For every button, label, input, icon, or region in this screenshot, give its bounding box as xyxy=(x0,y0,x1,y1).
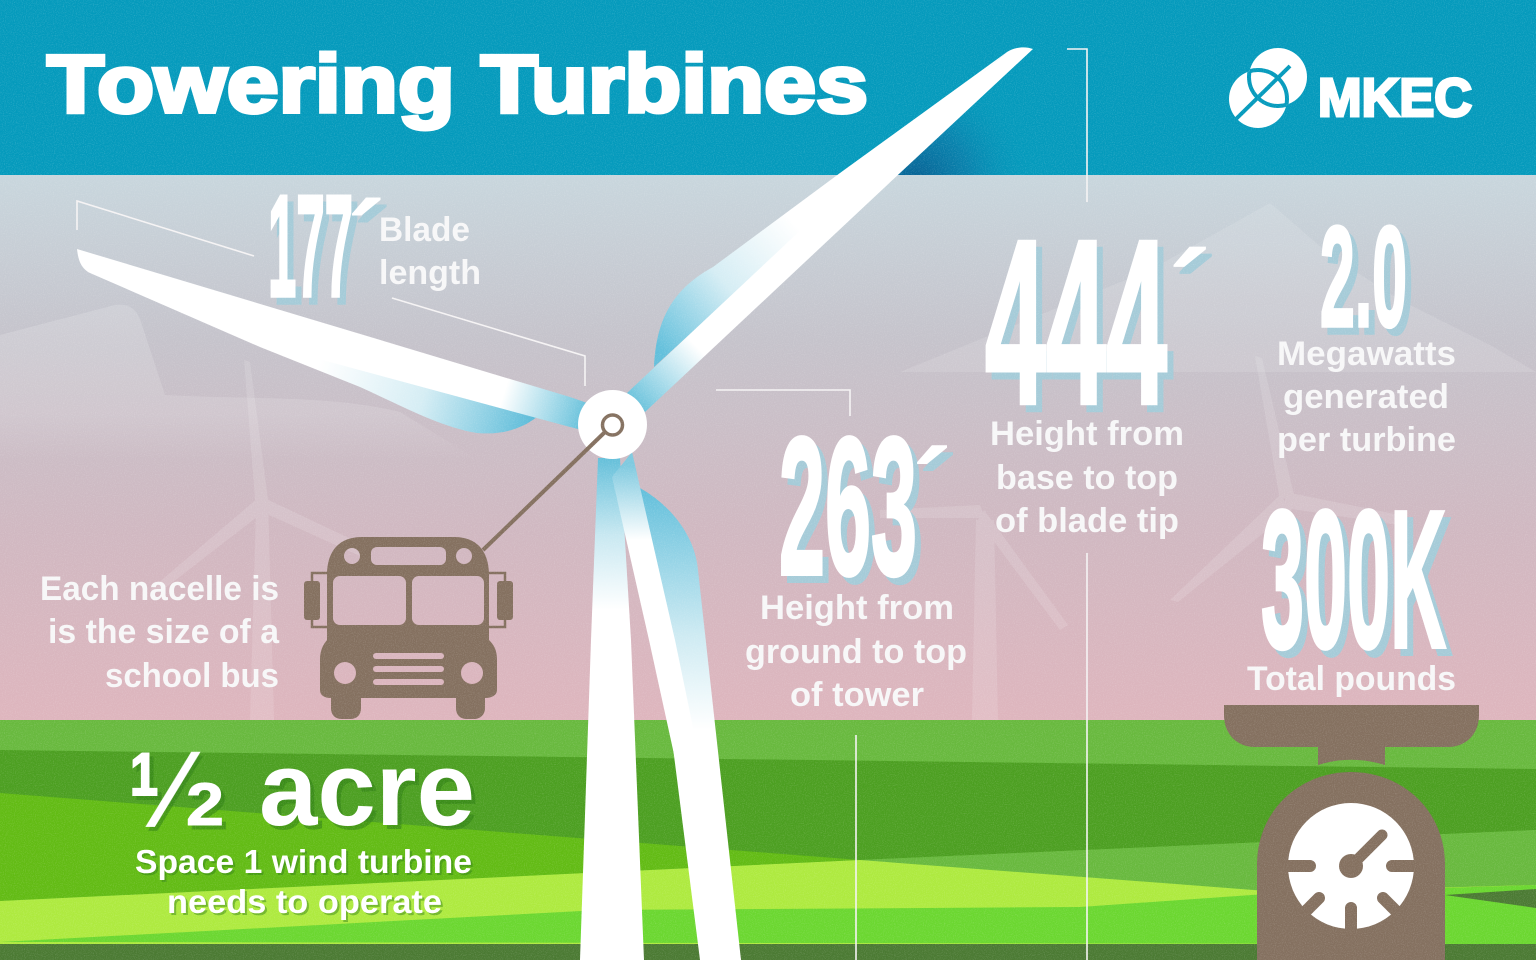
stat: blade length: Blade xyxy=(379,211,470,249)
stat: blade length: ´ xyxy=(347,179,385,307)
tower xyxy=(580,458,644,960)
stat: total pounds: Total pounds xyxy=(1247,660,1456,698)
stat: tower height xyxy=(745,397,967,714)
stat: blade length: length xyxy=(379,254,481,292)
logo: MKEC xyxy=(1229,48,1472,128)
blade bulge: left xyxy=(90,273,570,433)
stat: tower height: of tower xyxy=(790,676,924,714)
nacelle ring and pointer line xyxy=(483,432,605,550)
logo: MKEC: MKEC xyxy=(1318,68,1472,128)
text: nacelle size: Each nacelle is xyxy=(40,570,279,608)
stat: tower height: ground to top xyxy=(745,633,967,671)
stat: half acre: acre xyxy=(259,731,475,848)
stat: total pounds xyxy=(1247,470,1456,698)
annotation line: blade length bracket xyxy=(77,201,585,386)
text: nacelle size xyxy=(40,570,280,695)
faint background mountains xyxy=(0,203,1536,460)
blade: upper right xyxy=(627,47,1033,412)
stat: megawatts xyxy=(1277,198,1456,459)
stat: half acre: / xyxy=(140,735,206,846)
icon: school bus xyxy=(304,537,513,719)
title: Towering Turbines xyxy=(47,39,868,130)
faint background turbines xyxy=(150,356,1400,720)
stat: half acre: needs to operate xyxy=(167,883,442,920)
annotation line: tower height xyxy=(716,390,856,960)
stat: megawatts: Megawatts xyxy=(1277,335,1456,373)
turbine xyxy=(77,47,1033,960)
stat: total height: base to top xyxy=(996,459,1178,497)
text: nacelle size: is the size of a xyxy=(48,613,280,651)
ground: layered green fields xyxy=(0,720,1536,960)
blade bulge: upper right xyxy=(654,52,1007,367)
stat: megawatts: generated xyxy=(1283,378,1449,416)
stat: tower height: ´ xyxy=(912,425,952,559)
stat: megawatts: 2.0 xyxy=(1320,198,1407,357)
icon: weight scale xyxy=(1224,705,1479,960)
stat: megawatts: per turbine xyxy=(1277,421,1456,459)
stat: total height xyxy=(985,191,1211,540)
blade bulge: lower xyxy=(640,488,741,960)
stat: half acre xyxy=(130,731,475,920)
stat: half acre: 1 xyxy=(130,741,158,808)
stat: tower height: Height from xyxy=(760,589,954,627)
blade shadow on header xyxy=(880,49,1080,175)
sky background xyxy=(0,175,1536,720)
blade: lower xyxy=(612,452,741,960)
text: nacelle size: school bus xyxy=(105,657,279,695)
annotation line: total height xyxy=(1067,49,1087,960)
stat: total height: Height from xyxy=(990,415,1184,453)
stat: total height: of blade tip xyxy=(995,502,1179,540)
stat: blade length: 177 xyxy=(268,165,353,327)
header band xyxy=(0,0,1536,175)
stat: total height: 444 xyxy=(985,191,1167,453)
stat: half acre: Space 1 wind turbine xyxy=(135,843,472,880)
hub xyxy=(578,390,647,459)
stat: total height: ´ xyxy=(1168,224,1211,370)
stat: half acre: 2 xyxy=(186,771,224,838)
blade: left xyxy=(77,249,590,432)
stat: tower height: 263 xyxy=(779,397,917,616)
